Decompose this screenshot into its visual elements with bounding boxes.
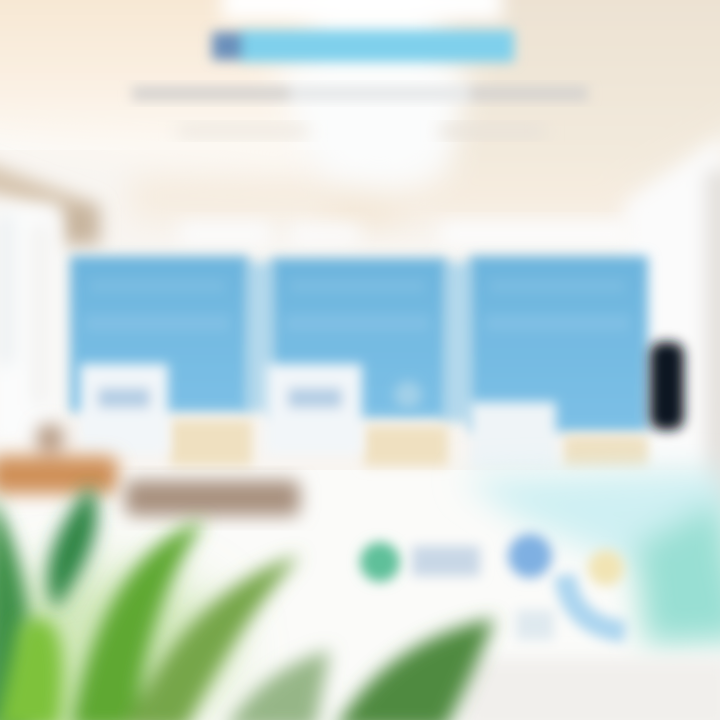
bright leaves — [0, 520, 300, 720]
right wall — [625, 140, 720, 510]
plant bottom center — [225, 618, 495, 720]
icon: blue arc — [516, 575, 625, 640]
subtitle line — [132, 86, 588, 101]
title bar — [212, 30, 514, 62]
logo: green circle — [360, 542, 400, 582]
orange furniture — [0, 424, 118, 494]
plant left — [0, 485, 300, 720]
pool water — [460, 470, 720, 645]
left window — [0, 205, 60, 445]
icon: yellow circle — [588, 550, 624, 586]
dark leaves — [0, 485, 97, 720]
panel: left blue card — [70, 256, 248, 412]
white box right — [470, 402, 556, 468]
plant glow — [0, 570, 230, 720]
floor panel lower right — [462, 658, 720, 720]
central light funnel — [270, 60, 470, 222]
black device — [650, 342, 684, 430]
white box left — [80, 364, 168, 454]
icon: blue circle — [508, 534, 552, 578]
card gaps — [244, 262, 474, 422]
ceiling — [0, 0, 720, 220]
secondary subtitle line — [178, 125, 545, 137]
white box middle — [266, 364, 422, 454]
logo text — [412, 546, 480, 576]
brown table — [125, 480, 300, 516]
sand strip right — [564, 436, 648, 466]
panel: middle blue card — [272, 258, 446, 418]
title bar icon — [212, 32, 242, 60]
panel: right blue card — [470, 256, 648, 432]
small icon in middle card — [394, 381, 422, 409]
top white banner — [222, 0, 502, 20]
left wall beam — [0, 160, 100, 245]
sand strip left — [170, 420, 252, 466]
sand strip middle — [364, 426, 448, 466]
header strip over panels — [180, 222, 630, 246]
